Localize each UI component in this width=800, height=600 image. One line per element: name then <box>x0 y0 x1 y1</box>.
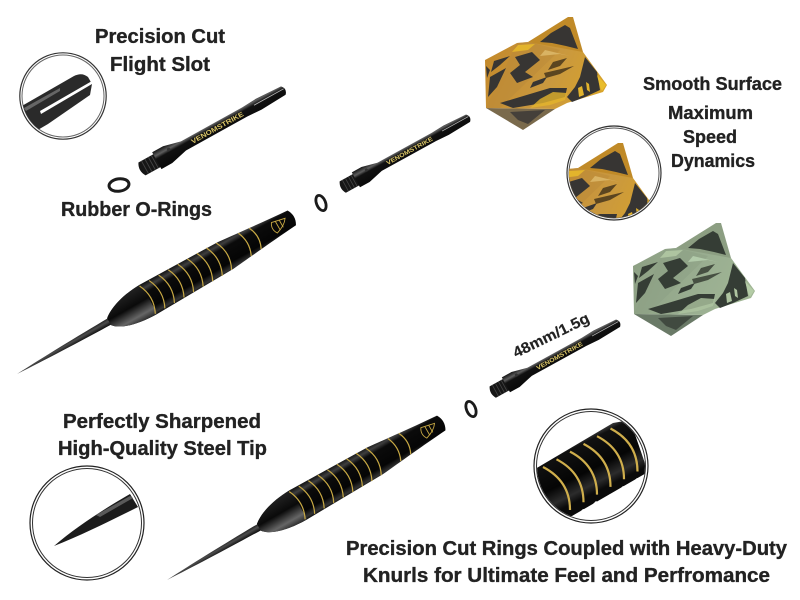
shaft: upper left <box>135 81 290 178</box>
heading: precision cut flight slot: Precision Cut <box>95 26 225 48</box>
shaft: lower <box>487 315 624 400</box>
icon: o-ring upper left <box>108 177 130 193</box>
shaft: middle <box>337 110 474 195</box>
dart barrel lower <box>159 407 452 595</box>
dart barrel upper <box>9 202 302 389</box>
flight: green <box>633 223 755 336</box>
heading: precision cut flight slot <box>95 26 225 76</box>
heading: perfectly sharpened steel tip <box>58 411 267 460</box>
shaft: upper left: VENOMSTRIKE <box>190 111 246 146</box>
text block: maximum speed dynamics: Maximum <box>668 102 753 123</box>
shaft: lower: VENOMSTRIKE <box>536 342 584 372</box>
callout: knurled rings magnifier <box>530 409 648 523</box>
label: shaft length: 48mm/1.5g <box>510 310 592 362</box>
icon: o-ring middle <box>314 194 328 212</box>
text block: maximum speed dynamics: Speed <box>683 126 737 147</box>
text block: maximum speed dynamics <box>668 102 755 171</box>
shaft: middle: VENOMSTRIKE <box>386 137 434 167</box>
icon: o-ring lower <box>464 400 478 418</box>
heading: perfectly sharpened steel tip: High-Quality Steel Tip <box>58 438 267 460</box>
heading: precision cut rings: Knurls for Ultimate Feel and Perfromance <box>363 565 770 587</box>
callout: flight magnifier <box>566 125 662 221</box>
heading: smooth surface: Smooth Surface <box>643 74 782 94</box>
text block: maximum speed dynamics: Dynamics <box>671 150 755 171</box>
callout: steel tip magnifier <box>30 466 144 580</box>
heading: perfectly sharpened steel tip: Perfectly Sharpened <box>63 411 261 433</box>
callout: flight slot magnifier <box>20 53 106 139</box>
heading: precision cut rings: Precision Cut Rings Coupled with Heavy-Duty <box>346 538 788 560</box>
heading: rubber o-rings: Rubber O-Rings <box>61 199 212 221</box>
heading: precision cut rings <box>346 538 788 587</box>
heading: precision cut flight slot: Flight Slot <box>110 54 210 76</box>
flight: gold <box>485 17 607 130</box>
